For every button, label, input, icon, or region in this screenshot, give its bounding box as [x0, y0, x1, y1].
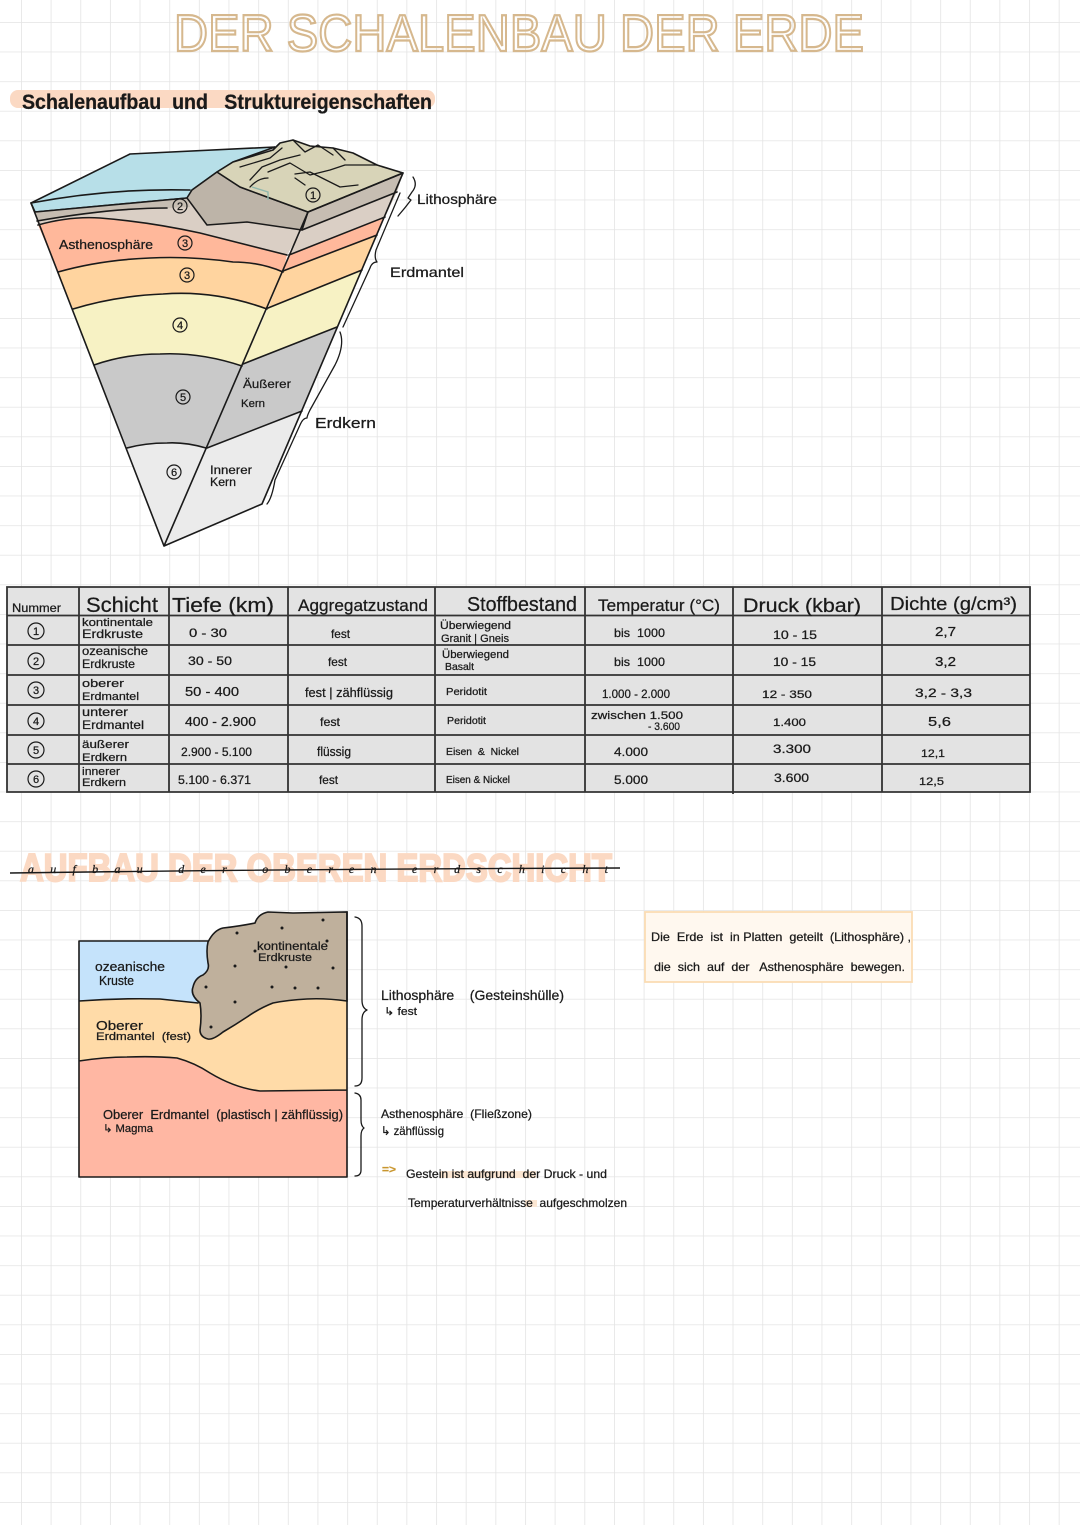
- notes: Lithosphäre: ↳ fest: [384, 1006, 417, 1018]
- table header: Nummer: [12, 601, 61, 615]
- continental slab: [187, 172, 308, 230]
- row 4: 5,6: [928, 714, 951, 729]
- row 4: Erdmantel: [82, 718, 144, 732]
- row 1: fest: [331, 627, 351, 641]
- row 1: Granit | Gneis: [441, 633, 509, 645]
- row 6: Eisen & Nickel: [446, 775, 510, 786]
- row 4: 4: [33, 716, 39, 728]
- layer numbers: 3: [184, 270, 190, 282]
- row 6: 5.000: [614, 773, 648, 787]
- row 2: 3,2: [935, 654, 956, 669]
- row 3: 50 - 400: [185, 684, 239, 699]
- row 3: Peridotit: [446, 687, 487, 698]
- brace labels: [267, 177, 497, 504]
- heading: Aufbau der oberen Erdschicht: aufbau der oberen erdschicht: [28, 862, 609, 876]
- row 1: 0 - 30: [189, 626, 227, 640]
- brace labels: Erdkern: [315, 415, 376, 432]
- layer numbers: 6: [171, 467, 177, 479]
- front face layers: [35, 198, 302, 255]
- row 5: 12,1: [921, 748, 945, 760]
- diagram labels: [59, 237, 291, 489]
- row 1: 1: [33, 626, 39, 638]
- row 4: zwischen 1.500: [591, 710, 683, 722]
- row 4: [28, 705, 951, 733]
- notes: Lithosphäre: Lithosphäre (Gesteinshülle): [381, 987, 564, 1003]
- layer numbers: 5: [180, 392, 186, 404]
- row 6: [28, 766, 944, 789]
- row 5: [28, 739, 945, 764]
- callout: die sich auf der Asthenosphäre bewegen.: [654, 960, 905, 974]
- callout: [645, 912, 912, 982]
- continental crust: [192, 912, 347, 1039]
- notes: Lithosphäre: [381, 987, 564, 1018]
- table header: Stoffbestand: [467, 594, 577, 616]
- row 2: 2: [33, 656, 39, 668]
- row 5: 3.300: [773, 742, 811, 756]
- row 3: oberer: [82, 678, 124, 690]
- heading: Schalenaufbau und Struktureigenschaften: Schalenaufbau und Struktureigenschaften: [22, 91, 432, 114]
- cross-section labels: [95, 939, 343, 1135]
- outlines: [31, 173, 403, 546]
- cross-section labels: Kruste: [99, 973, 134, 988]
- row 2: 10 - 15: [773, 655, 816, 669]
- table header: Dichte (g/cm³): [890, 594, 1017, 614]
- row 5: flüssig: [317, 744, 351, 759]
- brace labels: Lithosphäre: [417, 191, 497, 207]
- row 6: Erdkern: [82, 777, 126, 789]
- row 1: 2,7: [935, 624, 956, 639]
- braces: [355, 917, 367, 1176]
- cross-section labels: Oberer Erdmantel (plastisch | zähflüssig): [103, 1107, 343, 1122]
- callout: Die Erde ist in Platten geteilt (Lithosphäre) ,: [651, 930, 911, 944]
- heading: Aufbau der oberen Erdschicht: AUFBAU DER OBEREN ERDSCHICHT: [20, 847, 612, 890]
- diagram labels: Äußerer: [243, 377, 291, 391]
- row 1: Erdkruste: [82, 627, 143, 641]
- row 3: 3,2 - 3,3: [915, 686, 972, 700]
- row 3: [28, 678, 972, 703]
- row 2: 30 - 50: [188, 654, 232, 668]
- row 3: fest | zähflüssig: [305, 685, 393, 700]
- cross-section labels: kontinentale: [257, 939, 328, 953]
- row 2: ozeanische: [82, 644, 148, 658]
- row 6: 6: [33, 774, 39, 786]
- conclusion text: =>: [382, 1164, 396, 1176]
- title: DER SCHALENBAU DER ERDE: [174, 5, 864, 63]
- row 1: [28, 617, 956, 645]
- oceanic crust layer: [79, 941, 210, 1003]
- cross-section labels: ↳ Magma: [103, 1123, 154, 1135]
- row 6: 5.100 - 6.371: [178, 773, 251, 787]
- upper mantle layer: [79, 995, 347, 1091]
- table header: Schicht: [86, 594, 158, 617]
- cross-section labels: Erdmantel (fest): [96, 1031, 191, 1043]
- row 2: Basalt: [445, 662, 474, 673]
- cross-section labels: Oberer: [96, 1018, 144, 1033]
- layer numbers: 2: [177, 201, 183, 213]
- row 1: bis 1000: [614, 626, 665, 640]
- conclusion text: Gestein ist aufgrund der Druck - und: [406, 1167, 607, 1181]
- table: [7, 587, 1030, 794]
- ocean surface: [31, 147, 275, 212]
- outlines: [79, 912, 347, 1177]
- row 3: Erdmantel: [82, 691, 139, 703]
- row 2: [28, 644, 956, 673]
- row 6: 3.600: [774, 771, 809, 785]
- row 5: äußerer: [82, 739, 129, 751]
- table header: Temperatur (°C): [598, 596, 720, 615]
- row 6: innerer: [82, 766, 120, 778]
- notes: Asthenosphäre: [381, 1107, 532, 1138]
- row 4: Peridotit: [447, 716, 486, 727]
- cross-section labels: ozeanische: [95, 959, 165, 974]
- notes: Asthenosphäre: Asthenosphäre (Fließzone): [381, 1107, 532, 1121]
- right face layers: [302, 173, 403, 230]
- row 1: kontinentale: [82, 617, 153, 629]
- table header: Druck (kbar): [743, 596, 861, 617]
- row 2: Überwiegend: [442, 649, 509, 661]
- row 3: 12 - 350: [762, 689, 812, 701]
- diagram labels: Kern: [241, 398, 265, 410]
- conclusion text: Temperaturverhältnisse aufgeschmolzen: [408, 1196, 627, 1210]
- row 6: 12,5: [919, 776, 944, 788]
- notes: Asthenosphäre: ↳ zähflüssig: [381, 1124, 444, 1138]
- asthenosphere layer: [79, 1057, 347, 1177]
- cross-section labels: Erdkruste: [258, 952, 312, 964]
- row 2: fest: [328, 655, 348, 669]
- table header: Tiefe (km): [172, 595, 274, 617]
- upper layer cross-section diagram: [79, 912, 367, 1177]
- earth layer diagram: [31, 140, 497, 546]
- row 5: 2.900 - 5.100: [181, 745, 252, 759]
- row 4: unterer: [82, 705, 128, 719]
- table header: Aggregatzustand: [298, 596, 428, 615]
- layer numbers: 1: [310, 190, 316, 202]
- layer numbers: [167, 188, 320, 479]
- row 3: 3: [33, 685, 39, 697]
- row 6: fest: [319, 773, 339, 787]
- layer numbers: 3: [182, 238, 188, 250]
- row 5: Eisen & Nickel: [446, 747, 519, 758]
- table header: [12, 594, 1017, 617]
- row 5: 4.000: [614, 745, 648, 759]
- row 2: bis 1000: [614, 655, 665, 669]
- diagram labels: Asthenosphäre: [59, 237, 153, 252]
- row 4: 1.400: [773, 717, 806, 729]
- row 4: 400 - 2.900: [185, 714, 256, 729]
- layer numbers: 4: [177, 320, 183, 332]
- mountains: [217, 140, 403, 212]
- row 5: 5: [33, 745, 39, 757]
- conclusion text: [382, 1164, 627, 1210]
- row 1: 10 - 15: [773, 628, 817, 642]
- row 3: 1.000 - 2.000: [602, 687, 670, 701]
- row 4: - 3.600: [648, 721, 680, 733]
- row 4: fest: [320, 715, 341, 729]
- dots: [204, 918, 334, 1028]
- brace labels: Erdmantel: [390, 264, 464, 280]
- row 1: Überwiegend: [440, 620, 511, 632]
- row 2: Erdkruste: [82, 657, 135, 671]
- diagram labels: Innerer: [210, 463, 252, 477]
- row 5: Erdkern: [82, 752, 127, 764]
- diagram labels: Kern: [210, 475, 236, 489]
